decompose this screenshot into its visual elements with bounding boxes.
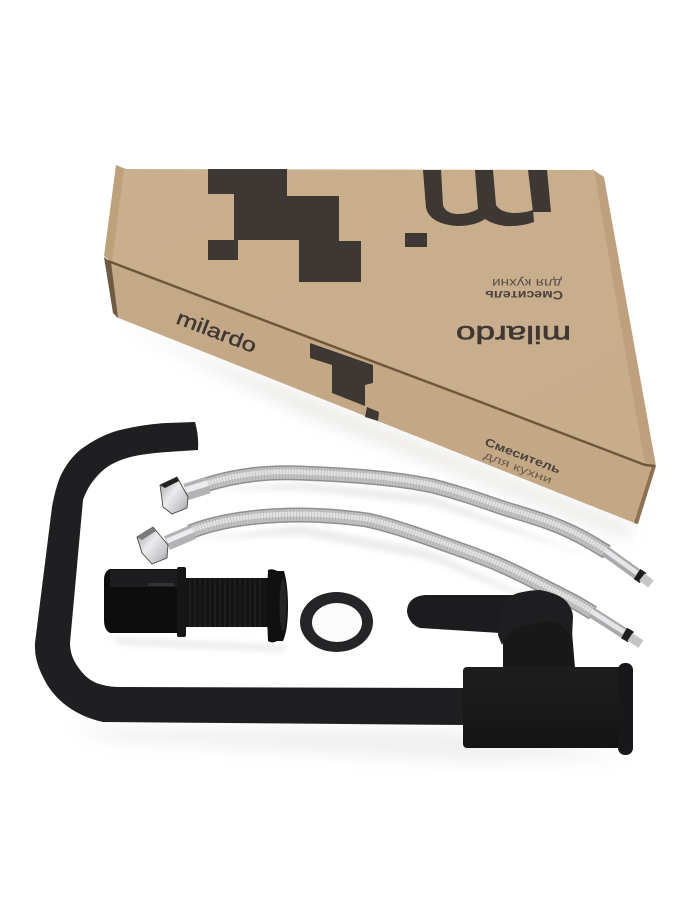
box top face xyxy=(112,169,645,466)
cardboard box xyxy=(104,165,656,524)
faucet body xyxy=(463,667,627,748)
box right dark edge xyxy=(634,466,656,524)
side pixel logo xyxy=(310,343,373,406)
upside-down brand: milardo xyxy=(456,320,571,348)
handle collar xyxy=(498,590,573,645)
logo dot xyxy=(405,233,427,247)
upper hose nut xyxy=(160,477,188,514)
upper hose end fitting xyxy=(605,551,637,574)
box right flap xyxy=(592,169,656,466)
threaded mounting shank xyxy=(104,567,288,642)
upper hose collar xyxy=(186,485,208,492)
faucet body end flange xyxy=(618,663,633,755)
lower hose collar xyxy=(167,532,193,543)
shank nut xyxy=(104,569,178,633)
shank thread xyxy=(185,578,269,627)
lower braided hose xyxy=(137,514,641,644)
shank flange xyxy=(267,569,288,642)
box crease xyxy=(108,261,655,466)
side brand: milardo xyxy=(173,307,260,358)
soft shadows xyxy=(70,322,636,762)
box front side xyxy=(110,262,655,524)
box left flap xyxy=(104,165,126,263)
upper braided hose xyxy=(160,472,651,584)
side subtitle: для кухни xyxy=(482,450,553,487)
faucet spout xyxy=(35,422,465,725)
lower hose end fitting xyxy=(591,612,624,633)
letter m logo on lid xyxy=(423,170,551,226)
faucet neck xyxy=(503,618,575,668)
upside-down subtitle: для кухни xyxy=(492,276,562,288)
faucet handle lever xyxy=(407,595,513,633)
black faucet xyxy=(35,422,633,755)
upside-down product name: Смеситель xyxy=(485,288,563,300)
box left dark edge xyxy=(104,257,118,318)
shank collar xyxy=(177,567,186,637)
side pixel logo block xyxy=(365,407,379,421)
rubber washer xyxy=(300,592,373,652)
lower hose nut xyxy=(137,527,168,564)
side product name: Смеситель xyxy=(483,437,562,476)
pixel logo on lid xyxy=(208,169,361,282)
